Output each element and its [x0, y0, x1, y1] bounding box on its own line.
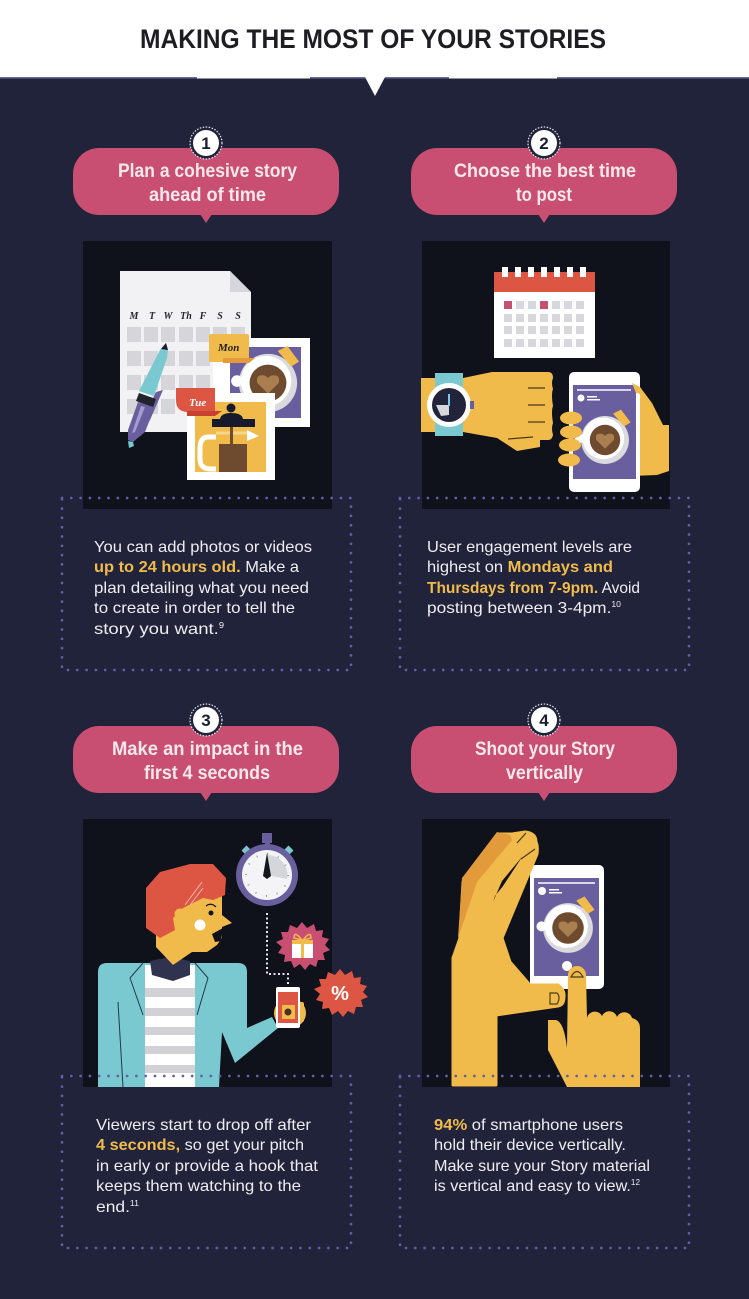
text block with dotted frame: up to 24 hours old. Make a [94, 559, 299, 576]
panel: step 3 make an impact [62, 704, 368, 1248]
icon: pen [128, 343, 168, 448]
heading pill: Shoot your Story [475, 739, 615, 760]
icon: percent badge: % [331, 983, 349, 1005]
tag: Mon [209, 334, 255, 363]
illustration: calendar, pen and photos: W [164, 311, 174, 322]
illustration: calendar, pen and photos: Th [180, 311, 192, 322]
text block with dotted frame: hold their device vertically. [434, 1137, 626, 1154]
illustration: man watching phone [83, 819, 332, 1087]
text block with dotted frame: 12 [631, 1178, 641, 1187]
photo: coffee cup [213, 338, 310, 427]
tag: Tue [176, 388, 222, 416]
heading pill: Choose the best time [454, 161, 636, 182]
text block with dotted frame: end. [96, 1199, 127, 1216]
text block with dotted frame: keeps them watching to the [96, 1178, 301, 1195]
number badge 2: 2 [539, 134, 549, 153]
text block with dotted frame [400, 498, 689, 670]
number badge 3: 3 [201, 711, 211, 730]
heading pill: first 4 seconds [144, 763, 270, 784]
header band with title: MAKING THE MOST OF YOUR STORIES [140, 24, 606, 54]
tag: Tue: Tue [189, 397, 206, 409]
illustration: calendar, pen and photos: M [129, 311, 140, 322]
text block with dotted frame: Make sure your Story material [434, 1158, 650, 1175]
illustration: calendar, pen and photos: S [235, 311, 241, 322]
icon: stopwatch [236, 833, 298, 906]
text block with dotted frame: You can add photos or videos [94, 539, 312, 556]
icon: wall calendar [494, 267, 595, 358]
text block with dotted frame [400, 1076, 689, 1248]
icon: pointing hand [548, 966, 640, 1087]
heading pill: Make an impact in the [112, 739, 303, 760]
panel: step 2 best time [400, 127, 689, 670]
text block with dotted frame: plan detailing what you need [94, 580, 309, 597]
text block with dotted frame [62, 1076, 351, 1248]
text block with dotted frame [62, 498, 351, 670]
number badge 1 [190, 127, 222, 159]
illustration: calendar, watch and phone [421, 241, 670, 509]
text block with dotted frame: 94% of smartphone users [434, 1117, 623, 1134]
icon: gift badge [276, 922, 330, 970]
icon: percent badge [314, 969, 368, 1017]
heading pill: vertically [506, 763, 583, 784]
number badge 3 [190, 704, 222, 736]
heading pill: Plan a cohesive story [118, 161, 297, 182]
illustration: calendar, pen and photos: S [217, 311, 223, 322]
header band with title [0, 0, 749, 96]
dotted connector [267, 913, 288, 985]
heading pill [73, 148, 339, 223]
number badge 2 [528, 127, 560, 159]
text block with dotted frame: is vertical and easy to view. [434, 1178, 628, 1195]
number badge 1: 1 [201, 134, 211, 153]
text block with dotted frame: posting between 3-4pm. [427, 600, 598, 617]
text block with dotted frame: User engagement levels are [427, 539, 632, 556]
heading pill: to post [516, 185, 573, 206]
icon: holding hand [453, 832, 564, 1085]
text block with dotted frame: in early or provide a hook that [96, 1158, 319, 1175]
illustration: calendar, pen and photos: T [149, 311, 156, 322]
icon: hand with watch [421, 372, 553, 451]
illustration: hands holding phone [422, 819, 670, 1087]
icon: phone in hand [558, 372, 669, 492]
panel: step 1 plan a story [62, 127, 351, 670]
number badge 4 [528, 704, 560, 736]
number badge 4: 4 [539, 711, 549, 730]
illustration: calendar, pen and photos [83, 241, 332, 509]
heading pill [411, 148, 677, 223]
panel: step 4 shoot vertically [400, 704, 689, 1248]
photo: french press [187, 393, 275, 480]
heading pill [73, 726, 339, 801]
heading pill: ahead of time [149, 185, 266, 206]
figure: man [98, 864, 278, 1087]
text block with dotted frame: to create in order to tell the [94, 600, 295, 617]
text block with dotted frame: 10 [611, 600, 622, 609]
text block with dotted frame: 9 [219, 621, 225, 630]
text block with dotted frame: story you want. [94, 621, 202, 638]
text block with dotted frame: 11 [130, 1199, 140, 1208]
text block with dotted frame: highest on Mondays and [427, 559, 613, 576]
illustration: calendar, pen and photos: F [199, 311, 207, 322]
text block with dotted frame: 4 seconds, so get your pitch [96, 1137, 304, 1154]
heading pill [411, 726, 677, 801]
text block with dotted frame: Viewers start to drop off after [96, 1117, 312, 1134]
tag: Mon: Mon [217, 342, 239, 354]
icon: phone in hand [274, 987, 306, 1028]
icon: phone [530, 865, 604, 989]
text block with dotted frame: Thursdays from 7-9pm. Avoid [427, 580, 640, 597]
